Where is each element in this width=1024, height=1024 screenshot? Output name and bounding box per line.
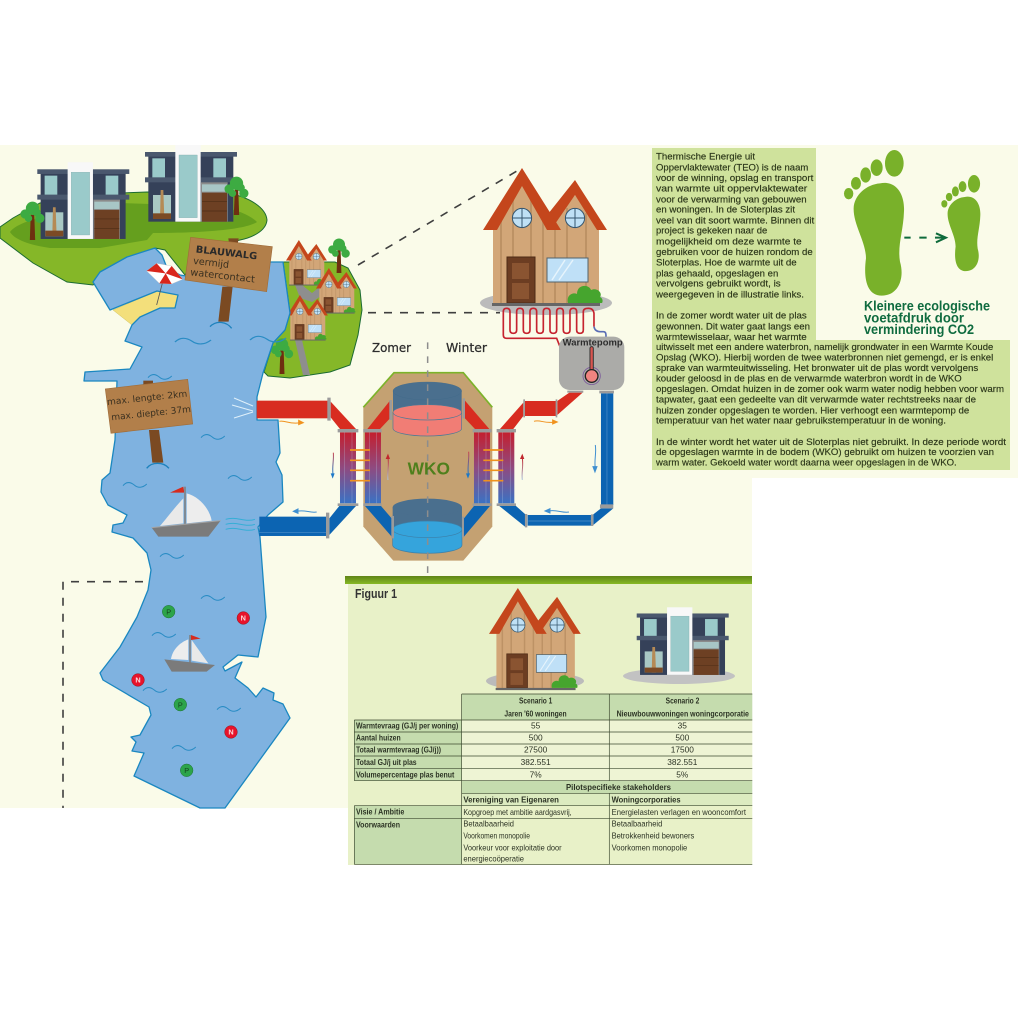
stakeholders: Voorkeur voor exploitatie door	[463, 842, 562, 852]
cold storage tank	[393, 499, 462, 553]
heading: Figuur 1: Figuur 1	[355, 587, 397, 601]
small house 1	[286, 240, 327, 286]
scenario values	[521, 721, 698, 779]
scenario values: 27500	[524, 745, 548, 755]
text block: explanation: voor de verwarming van gebouwen	[656, 194, 807, 205]
WKO diagram with pipes	[257, 342, 614, 575]
markers N: N	[135, 676, 141, 685]
table header: Scenario 1	[519, 696, 553, 706]
text block: explanation: weergegeven in de illustratie links.	[655, 289, 804, 300]
text block: explanation: van warmte uit oppervlaktewater	[656, 184, 808, 195]
row labels: Warmtevraag (GJ/j per woning)	[356, 721, 458, 731]
table header: Scenario 2	[666, 696, 700, 706]
text block: explanation: warmtewisselaar, waar het warmte	[655, 332, 807, 343]
small footprint	[941, 175, 980, 271]
stakeholders: Vereniging van Eigenaren	[463, 794, 559, 804]
background: cream page area	[0, 145, 1018, 808]
text block: explanation: project is gekeken naar de	[656, 226, 767, 237]
scenario values: 7%	[530, 769, 542, 779]
small house 2	[316, 268, 357, 314]
dashed arrow	[904, 233, 946, 242]
table: scenarios and stakeholders	[354, 694, 752, 864]
scenario values: 500	[529, 733, 543, 743]
heading: kleinere voetafdruk: voetafdruk door	[864, 310, 965, 325]
row labels	[356, 721, 458, 829]
text block: explanation: sprake van warmteuitwisseling. Het bronwater uit de plas wordt vervolgens	[656, 363, 978, 374]
heat exchange coils	[350, 450, 503, 481]
boat small	[164, 635, 215, 672]
text block: explanation: Thermische Energie uit	[656, 152, 755, 163]
scenario values: 17500	[671, 745, 694, 755]
text block: explanation: Opslag (WKO). Hierbij worden de twee waterbronnen niet gemengd, er is enkel	[656, 353, 993, 364]
stakeholders: energiecoöperatie	[463, 854, 524, 864]
panel header bar	[345, 576, 752, 584]
sign: Blauwalg: watercontact	[190, 267, 256, 286]
table header: Nieuwbouwwoningen woningcorporatie	[617, 709, 749, 719]
heading: kleinere voetafdruk: vermindering CO2	[864, 322, 974, 337]
modern house right	[145, 145, 237, 222]
vertical flow arrows	[331, 452, 524, 480]
large footprint	[844, 150, 904, 296]
stakeholders: Pilotspecifieke stakeholders	[566, 782, 671, 792]
text block: explanation	[655, 152, 1006, 469]
panel: intro text	[652, 148, 1010, 470]
dashed zoom lines	[63, 168, 522, 808]
lake Sloterplas	[84, 248, 290, 808]
tree right	[225, 177, 248, 215]
sign: max. lengte en diepte	[105, 379, 193, 468]
heat pump: Warmtepomp	[563, 338, 623, 348]
text block: explanation: en woningen. In de Sloterplas zit	[656, 205, 795, 216]
text block: explanation: temperatuur van het water naar gebruikstemperatuur in de woning.	[656, 416, 946, 427]
text block: explanation: plas gehaald, opgeslagen en	[656, 268, 778, 279]
WKO ground body	[363, 373, 492, 561]
heading: kleinere voetafdruk	[864, 299, 990, 337]
table header: Jaren '60 woningen	[504, 709, 567, 719]
flow arrows orange	[279, 420, 557, 425]
text block: explanation: warm water. Gekoeld water wordt daarna weer opgeslagen in de WKO.	[655, 458, 957, 469]
stakeholders: Voorkomen monopolie	[612, 842, 688, 852]
label: WKO: WKO	[408, 458, 450, 478]
text block: explanation: voor de winning, opslag en transport	[656, 173, 814, 184]
heading: kleinere voetafdruk: Kleinere ecologische	[864, 299, 990, 314]
text block: explanation: huizen zonder opgeslagen te worden. Hier verhoogt een warmtepomp de	[656, 405, 969, 416]
scenario values: 500	[675, 733, 690, 743]
boats and nutrient markers	[132, 487, 255, 777]
summer pipes	[257, 398, 394, 538]
tree left	[21, 202, 44, 240]
scenario values: 55	[531, 721, 541, 731]
flow arrows blue	[293, 445, 597, 513]
panel: Figuur 1 background	[348, 578, 752, 865]
text block: explanation: vervolgens gebruikt wordt, is	[656, 279, 781, 290]
text block: explanation: kouder geloosd in de plas en de verwarmde waterbron wordt in de WKO	[656, 373, 962, 384]
boat large	[152, 487, 221, 537]
markers N: N	[241, 614, 246, 623]
modern house left	[37, 162, 129, 239]
scenario values: 5%	[676, 769, 689, 779]
outflow waves	[226, 518, 255, 530]
stakeholders	[463, 782, 747, 864]
large house	[480, 168, 612, 315]
stakeholders: Kopgroep met ambitie aardgasvrij,	[463, 807, 572, 817]
markers P: P	[184, 766, 189, 775]
text block: explanation: uitwisselt met een andere waterbron, namelijk grondwater in een Warmte Koude	[656, 342, 993, 353]
text block: explanation: mogelijkheid om deze warmte te	[656, 236, 802, 247]
heading: Winter: Winter	[446, 341, 487, 355]
text block: explanation: tapwater, gaat een gedeelte van dit verwarmde water rechtstreeks naar de	[656, 395, 976, 406]
text block: explanation: gebruiken voor de huizen rondom de	[656, 247, 813, 258]
stakeholders: Betrokkenheid bewoners	[612, 831, 694, 841]
stakeholders: Woningcorporaties	[612, 794, 681, 804]
scenario 2 house	[623, 607, 735, 684]
heating coil under house	[503, 308, 606, 347]
stakeholders: Voorkomen monopolie	[463, 831, 530, 841]
sign: Blauwalg	[185, 237, 272, 328]
markers P	[162, 605, 193, 777]
icon: umbrella	[147, 263, 183, 305]
waves on the lake	[123, 336, 286, 750]
markers P: P	[166, 607, 171, 616]
heading: Zomer: Zomer	[372, 341, 411, 355]
top-left island with modern houses	[0, 145, 267, 285]
row labels: Voorwaarden	[356, 819, 400, 829]
winter pipes	[462, 391, 614, 537]
intake water lines	[232, 398, 253, 418]
text block: explanation: Sloterplas. Hoe de warmte uit de	[656, 258, 797, 269]
icon: footprints	[844, 150, 980, 296]
row labels: Totaal GJ/j uit plas	[356, 757, 417, 767]
scenario values: 35	[678, 721, 687, 731]
tree on island bottom	[271, 338, 293, 374]
sign: Blauwalg: vermijd	[193, 256, 230, 271]
row labels: Aantal huizen	[356, 733, 401, 743]
warm storage tank	[393, 382, 462, 436]
stakeholders: Energielasten verlagen en wooncomfort	[612, 807, 747, 817]
scenario values: 382.551	[521, 757, 551, 767]
centre dashed line	[425, 342, 430, 575]
markers N	[132, 612, 250, 738]
text block: explanation: Oppervlaktewater (TEO) is de naam	[656, 162, 808, 173]
markers N: N	[228, 728, 234, 737]
small house 3	[287, 295, 328, 341]
text block: explanation: de opgeslagen warmte in de bodem (WKO) gebruikt om huizen te voorzien van	[656, 447, 994, 458]
right island with small houses	[264, 238, 362, 378]
text block: explanation: In de winter wordt het water uit de Sloterplas niet gebruikt. In deze periode wordt	[656, 437, 1006, 448]
grass line	[363, 373, 492, 407]
text block: explanation: veel van dit soort warmte. Binnen dit	[656, 215, 815, 226]
sign: max. lengte en diepte: max. diepte: 37m	[111, 405, 191, 423]
sign: Blauwalg: BLAUWALG	[195, 244, 258, 262]
stakeholders: Betaalbaarheid	[612, 819, 663, 829]
table header	[504, 696, 749, 719]
stakeholders: Betaalbaarheid	[463, 819, 514, 829]
scenario 1 house	[486, 588, 584, 690]
tree on island top	[328, 238, 350, 273]
sign: max. lengte en diepte: max. lengte: 2km	[107, 390, 188, 408]
text block: explanation: gewonnen. Dit water gaat langs een	[656, 321, 810, 332]
thermometer	[583, 347, 600, 385]
text block: explanation: opgeslagen. Omdat huizen in de zomer ook warm water nodig hebben voor warm	[656, 384, 1004, 395]
scenario values: 382.551	[667, 757, 698, 767]
row labels: Totaal warmtevraag (GJ/j))	[356, 745, 441, 755]
row labels: Visie / Ambitie	[356, 807, 405, 817]
text block: explanation: In de zomer wordt water uit de plas	[656, 311, 807, 322]
beach	[113, 291, 178, 325]
heat pump	[559, 337, 624, 390]
row labels: Volumepercentage plas benut	[356, 769, 455, 779]
markers P: P	[178, 700, 183, 709]
